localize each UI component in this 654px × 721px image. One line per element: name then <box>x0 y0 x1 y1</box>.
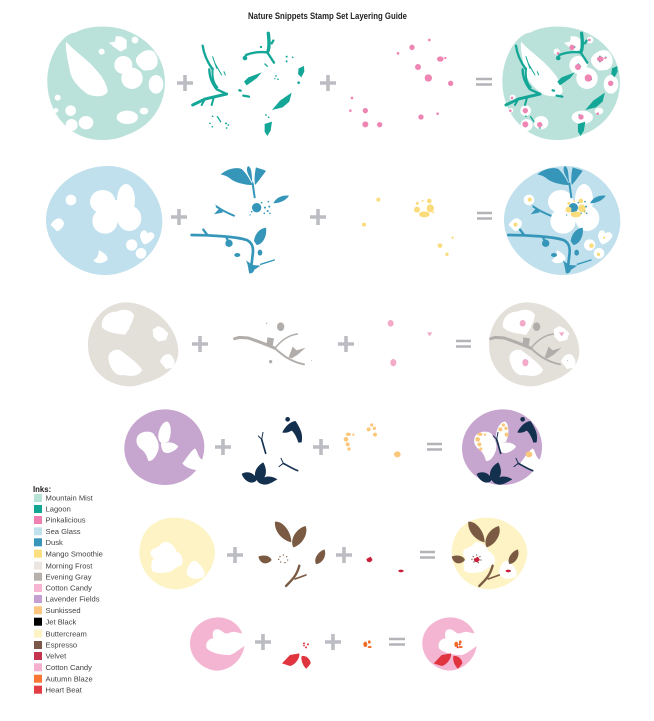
row 1 base: Mountain Mist <box>47 27 165 140</box>
row 5 stamp layer: Velvet <box>366 557 404 572</box>
row 2 base: Sea Glass <box>46 166 162 275</box>
row 1 result <box>502 27 620 140</box>
plus <box>255 634 271 650</box>
legend: inks: Dusk <box>46 538 63 547</box>
plus <box>192 336 208 352</box>
row 6 result <box>422 617 477 671</box>
legend: inks: Autumn Blaze <box>46 674 93 683</box>
legend: inks: Mountain Mist <box>46 494 94 503</box>
equals <box>476 79 492 84</box>
row 6 stamp layer: Heart Beat <box>282 642 311 669</box>
row 3 stamp layer: Evening Gray <box>235 322 312 364</box>
plus <box>325 634 341 650</box>
legend: inks: Cotton Candy <box>46 663 92 672</box>
legend: inks: Sunkissed <box>46 606 81 615</box>
title: Nature Snippets Stamp Set Layering Guide <box>248 11 407 21</box>
row 3 stamp layer: Cotton Candy <box>388 320 432 366</box>
equals <box>477 213 492 218</box>
row 2 result <box>504 166 620 275</box>
row 1 stamp layer: Pinkalicious <box>349 39 453 127</box>
row 1 stamp layer: Lagoon <box>193 33 304 136</box>
equals <box>420 552 435 558</box>
legend: inks: Mango Smoothie <box>46 549 103 558</box>
legend: inks: Sea Glass <box>46 527 81 536</box>
row 2 stamp layer: Mango Smoothie <box>362 198 454 256</box>
row 6 stamp layer: Autumn Blaze <box>363 640 372 648</box>
legend: inks: Cotton Candy <box>46 584 92 593</box>
legend: inks: Morning Frost <box>46 561 93 570</box>
equals <box>456 341 471 346</box>
row 5 result <box>452 518 527 589</box>
plus <box>215 439 231 455</box>
plus <box>320 75 336 91</box>
row 3 base: Morning Frost <box>88 302 178 386</box>
legend: inks: Lagoon <box>46 505 71 514</box>
legend: inks <box>33 485 103 694</box>
equals <box>389 639 405 644</box>
row 2 stamp layer: Dusk <box>192 166 289 273</box>
plus <box>171 209 187 225</box>
legend: inks: Jet Black <box>46 617 77 626</box>
plus <box>336 547 352 563</box>
legend: inks: Buttercream <box>46 629 87 638</box>
row 4 base: Lavender Fields <box>124 409 204 485</box>
plus <box>313 439 329 455</box>
legend: inks: Velvet <box>46 652 67 661</box>
plus <box>310 209 326 225</box>
plus <box>338 336 354 352</box>
row 3 result <box>489 302 579 386</box>
row 5 base: Buttercream <box>139 518 215 589</box>
legend: inks: Evening Gray <box>46 572 92 581</box>
equals <box>427 444 442 450</box>
plus <box>177 75 193 91</box>
legend: inks: Lavender Fields <box>46 595 100 604</box>
row 4 stamp layer: Jet Black <box>242 417 302 485</box>
legend: inks: Pinkalicious <box>46 516 86 525</box>
row 5 stamp layer: Espresso <box>258 522 325 586</box>
row 4 stamp layer: Sunkissed <box>344 423 401 457</box>
plus <box>227 547 243 563</box>
legend: inks: Espresso <box>46 641 77 650</box>
row 6 base: Cotton Candy <box>190 617 244 671</box>
legend: inks: Heart Beat <box>46 685 83 694</box>
row 4 result <box>462 409 542 485</box>
legend heading: Inks: <box>33 485 51 494</box>
